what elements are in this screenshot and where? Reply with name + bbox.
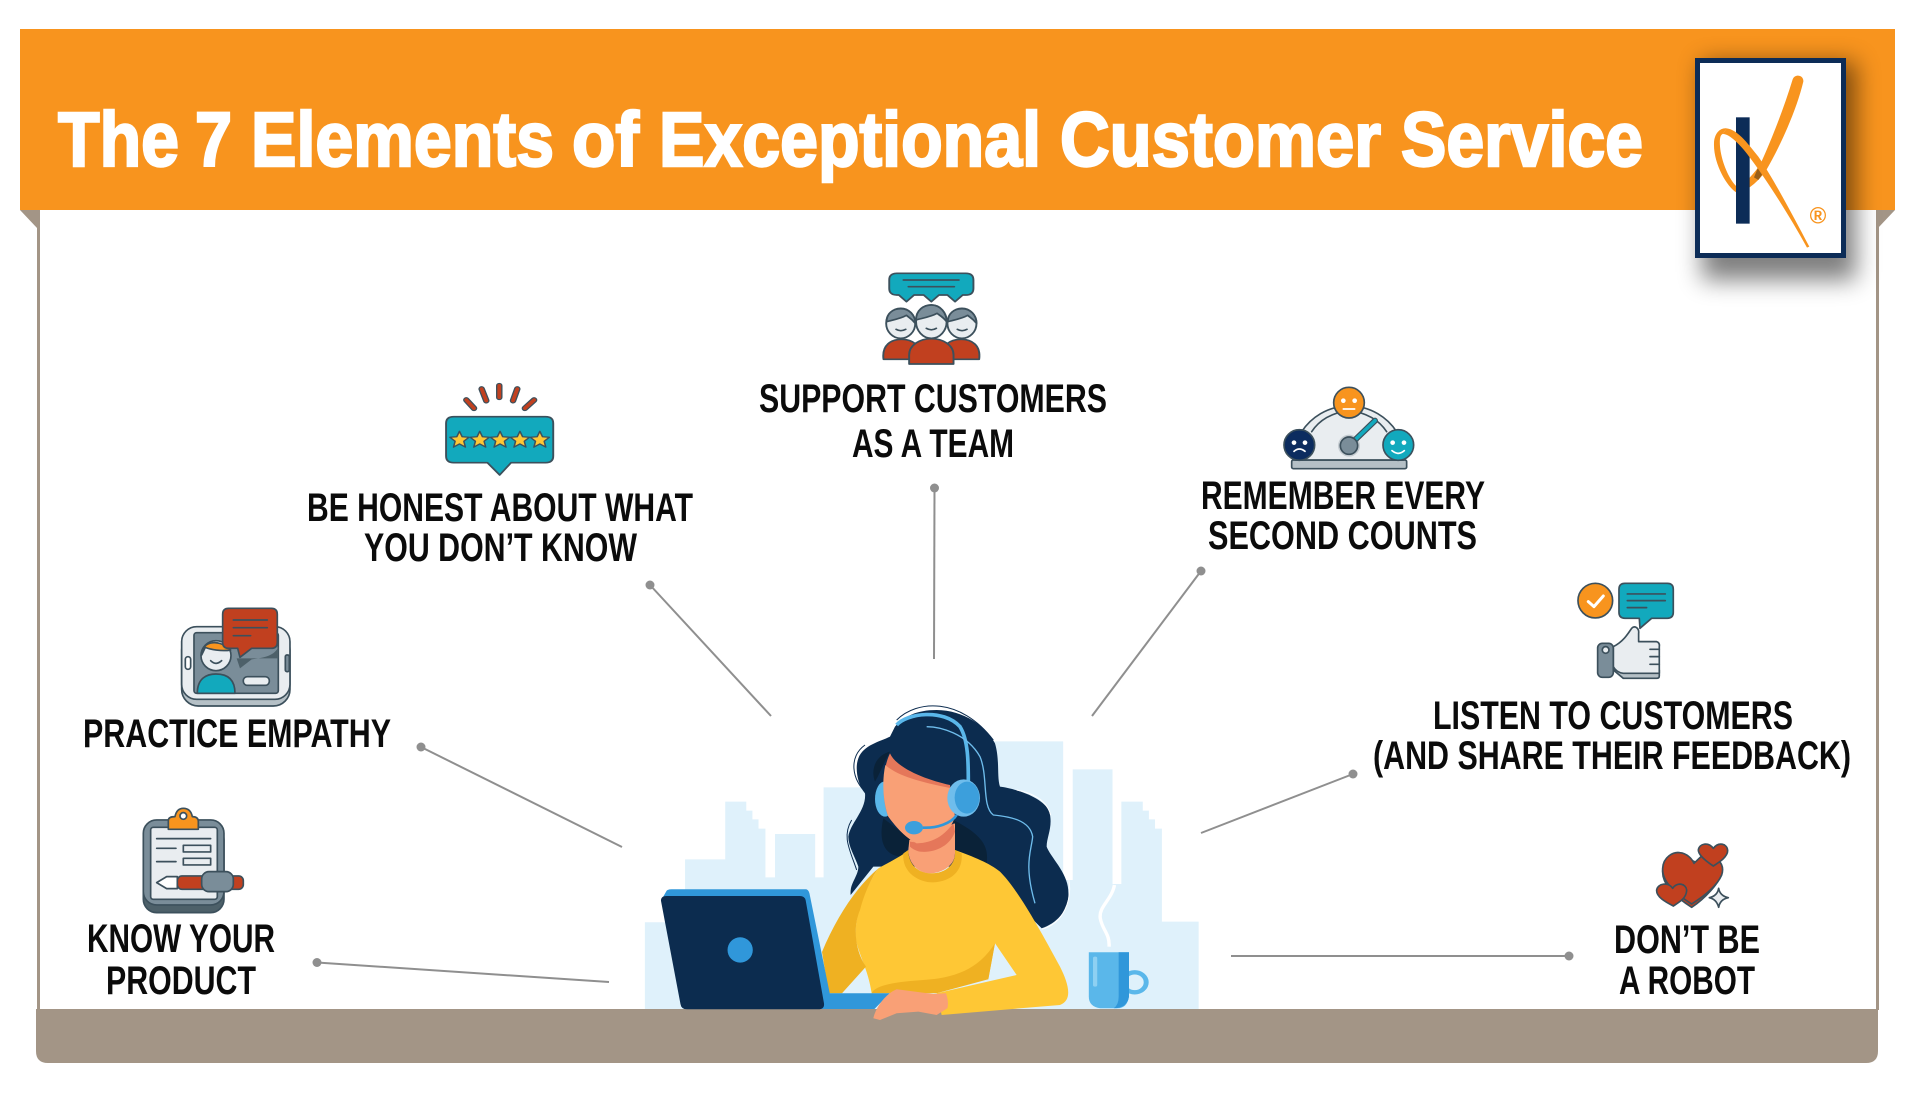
hair highlights xyxy=(847,706,1070,929)
label: every second counts: SECOND COUNTS xyxy=(1208,514,1477,558)
icon: star rating xyxy=(446,386,553,475)
panel: white stage frame xyxy=(20,210,1895,1010)
icon: satisfaction gauge xyxy=(1284,387,1414,469)
title: 7 xyxy=(195,97,232,183)
label: don't be a robot: DON’T BE xyxy=(1614,918,1760,962)
connector: support as a team xyxy=(930,484,939,659)
label: support customers: AS A TEAM xyxy=(852,422,1014,466)
title: Elements xyxy=(251,97,554,183)
steam xyxy=(1100,885,1114,947)
title: Exceptional xyxy=(659,97,1041,183)
icon: know your product xyxy=(143,808,243,913)
logo: ® xyxy=(1810,203,1827,229)
connector: be honest xyxy=(646,580,771,716)
title xyxy=(58,97,1643,183)
label: support customers: SUPPORT CUSTOMERS xyxy=(759,377,1107,421)
label: don't be a robot xyxy=(1614,918,1760,1003)
left earcup xyxy=(875,781,895,817)
coffee mug xyxy=(1123,972,1146,992)
label: practice empathy: PRACTICE EMPATHY xyxy=(83,712,391,756)
label: know your product xyxy=(87,917,275,1003)
title: The xyxy=(58,97,179,183)
label: be honest xyxy=(307,486,693,570)
neck xyxy=(908,823,955,873)
icon: team xyxy=(883,273,979,364)
headset xyxy=(897,715,968,782)
sweater xyxy=(856,850,1068,1015)
icon: practice empathy xyxy=(182,608,290,706)
connector: don't be a robot xyxy=(1231,952,1574,960)
label: be honest: YOU DON’T KNOW xyxy=(364,526,637,570)
label: listen to customers xyxy=(1373,694,1851,778)
icon: feedback thumbs up xyxy=(1578,583,1673,678)
connector: know your product xyxy=(312,958,609,982)
label: don't be a robot: A ROBOT xyxy=(1619,959,1755,1003)
label: support customers xyxy=(759,377,1107,466)
agent illustration xyxy=(661,706,1146,1020)
header banner xyxy=(20,29,1895,210)
city skyline xyxy=(645,741,1199,1009)
title: of xyxy=(572,97,639,183)
connector: practice empathy xyxy=(416,742,622,847)
label: every second counts: REMEMBER EVERY xyxy=(1201,474,1485,518)
label: be honest: BE HONEST ABOUT WHAT xyxy=(307,486,693,530)
title: Customer xyxy=(1060,97,1381,183)
logo xyxy=(1698,60,1856,280)
title: Service xyxy=(1401,97,1643,183)
label: know your product: PRODUCT xyxy=(106,959,256,1003)
connector: listen to customers xyxy=(1201,770,1358,833)
laptop xyxy=(661,889,890,1009)
icon: hearts xyxy=(1657,844,1728,907)
label: listen to customers: LISTEN TO CUSTOMERS xyxy=(1433,694,1793,738)
label: every second counts xyxy=(1201,474,1485,558)
desk xyxy=(36,1009,1878,1063)
connector: every second counts xyxy=(1092,566,1206,716)
hair xyxy=(848,710,1068,928)
face xyxy=(884,753,955,843)
label: know your product: KNOW YOUR xyxy=(87,917,275,961)
hand xyxy=(873,989,948,1020)
